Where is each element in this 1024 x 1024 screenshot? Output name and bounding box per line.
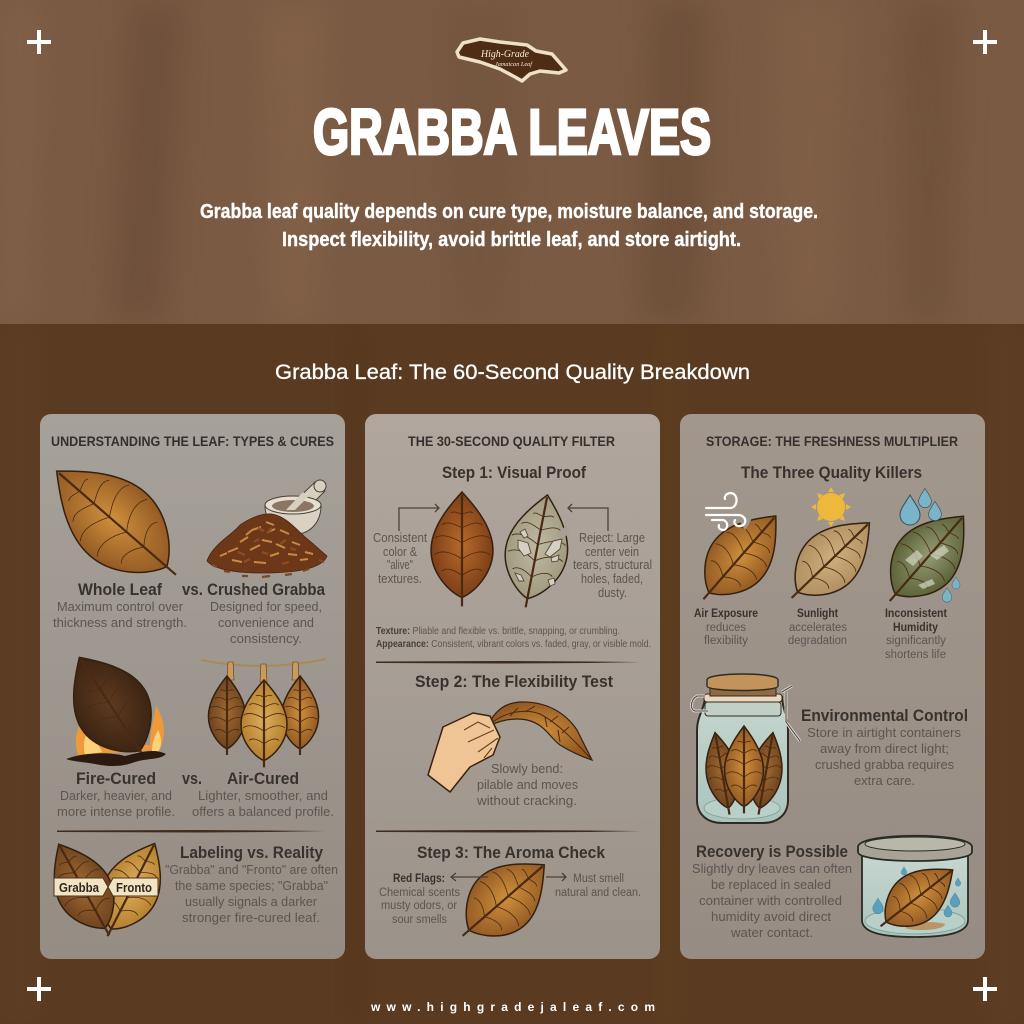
icon: moldy leaf — [866, 495, 987, 622]
text: labeling description: stronger fire-cured leaf. — [182, 910, 320, 925]
subtitle — [200, 201, 818, 251]
text: labeling description — [165, 862, 338, 925]
icon: grabba and fronto leaves with labels: Fronto — [116, 881, 152, 895]
background — [0, 0, 1024, 324]
decorative plus: top left — [27, 30, 51, 54]
icon: water drops — [900, 488, 960, 602]
text: recovery description: humidity avoid direct — [711, 909, 831, 924]
logo: Jamaican Leaf — [495, 61, 533, 68]
icon: grabba and fronto leaves with labels: Grabba — [59, 881, 100, 895]
text: inconsistent humidity: Humidity — [893, 622, 939, 634]
icon: hand bending leaf — [428, 702, 592, 792]
panel heading: STORAGE: THE FRESHNESS MULTIPLIER — [706, 433, 958, 449]
text: recovery description — [692, 861, 852, 940]
text: sunlight: Sunlight — [797, 608, 838, 620]
text: reject caption — [573, 530, 652, 600]
text: labeling description: "Grabba" and "Fronto" are often — [165, 862, 338, 877]
comparison label: fire vs air — [76, 769, 299, 788]
heading: recovery: Recovery is Possible — [696, 842, 848, 861]
text: texture and appearance notes: Texture: Pliable and flexible vs. brittle, snapping, or crumbling. — [376, 625, 620, 637]
text: crushed description — [210, 599, 322, 646]
comparison label: fire vs air: vs. — [182, 769, 202, 788]
text: recovery description: be replaced in sealed — [711, 877, 831, 892]
text: inconsistent humidity — [885, 608, 947, 661]
comparison label: whole vs crushed — [78, 580, 325, 599]
text: sunlight: degradation — [788, 635, 847, 647]
text: whole leaf description — [53, 599, 187, 630]
logo — [457, 39, 566, 81]
arrow: good leaf — [399, 504, 439, 531]
panel: types and cures — [29, 414, 345, 959]
icon: whole leaf — [29, 439, 203, 607]
icon: fire-cured leaf — [48, 637, 176, 779]
comparison label: whole vs crushed: Whole Leaf — [78, 580, 162, 599]
text: reject caption: Reject: Large — [579, 530, 645, 545]
step 1 heading: Step 1: Visual Proof — [442, 463, 586, 482]
text: whole leaf description: thickness and strength. — [53, 615, 187, 630]
text: red flags — [379, 873, 460, 926]
heading: environmental control: Environmental Control — [801, 706, 968, 725]
text: inconsistent humidity: Inconsistent — [885, 608, 947, 620]
text: crushed description: convenience and — [218, 615, 314, 630]
text: labeling description: the same species; "Grabba" — [175, 878, 328, 893]
text: clean smell — [555, 873, 641, 899]
text: recovery description: Slightly dry leaves can often — [692, 861, 852, 876]
text: inconsistent humidity: shortens life — [885, 649, 946, 661]
text: inconsistent humidity: significantly — [886, 635, 946, 647]
section heading: Grabba Leaf: The 60-Second Quality Breakdown — [275, 361, 750, 384]
text: texture and appearance notes — [376, 625, 651, 650]
comparison label: whole vs crushed: vs. Crushed Grabba — [182, 580, 325, 599]
icon: good leaf — [431, 492, 493, 606]
icon: jar with leaves — [691, 674, 800, 823]
text: good leaf caption — [373, 530, 427, 586]
icon: wind — [706, 493, 745, 530]
text: good leaf caption: color & — [383, 544, 417, 559]
text: reject caption: center vein — [585, 544, 639, 559]
text: environmental control description: crushed grabba requires — [815, 757, 954, 772]
panel: storage — [680, 414, 987, 959]
text: fire-cured description — [57, 788, 175, 819]
title: GRABBA LEAVES — [313, 96, 711, 168]
icon: sun-faded leaf — [771, 502, 890, 619]
text: air exposure: Air Exposure — [694, 608, 758, 620]
text: recovery description: water contact. — [730, 925, 813, 940]
text: flexibility caption: pilable and moves — [477, 777, 578, 792]
text: air-cured description: Lighter, smoother, and — [198, 788, 328, 803]
text: reject caption: holes, faded, — [581, 571, 643, 586]
text: air exposure — [694, 608, 758, 647]
text: reject caption: tears, structural — [573, 557, 652, 572]
text: flexibility caption — [476, 761, 578, 808]
panel heading: UNDERSTANDING THE LEAF: TYPES & CURES — [51, 433, 334, 449]
text: crushed description: Designed for speed, — [210, 599, 322, 614]
text: texture and appearance notes: Appearance: Consistent, vibrant colors vs. faded, gray, or visible mold. — [376, 638, 651, 650]
text: red flags: Chemical scents — [379, 887, 460, 899]
text: sunlight — [788, 608, 847, 647]
decorative plus: bottom right — [973, 977, 997, 1001]
text: fire-cured description: Darker, heavier, and — [60, 788, 172, 803]
text: air exposure: flexibility — [704, 635, 748, 647]
text: reject caption: dusty. — [598, 585, 627, 600]
text: good leaf caption: textures. — [378, 571, 422, 586]
text: air-cured description — [192, 788, 334, 819]
text: red flags: musty odors, or — [381, 900, 457, 912]
text: crushed description: consistency. — [230, 631, 302, 646]
heading: labeling vs reality: Labeling vs. Reality — [180, 843, 323, 862]
step 3 heading: Step 3: The Aroma Check — [417, 843, 605, 862]
text: recovery description: container with controlled — [699, 893, 842, 908]
icon: air-cured leaves on a line — [201, 659, 326, 767]
text: air-cured description: offers a balanced profile. — [192, 804, 334, 819]
icon: damaged leaf — [495, 489, 578, 613]
text: air exposure: reduces — [706, 622, 746, 634]
icon: crushed grabba with mortar — [207, 480, 327, 577]
text: clean smell: natural and clean. — [555, 887, 641, 899]
text: fire-cured description: more intense profile. — [57, 804, 175, 819]
panel heading: THE 30-SECOND QUALITY FILTER — [408, 433, 615, 449]
text: labeling description: usually signals a darker — [185, 894, 318, 909]
text: red flags: Red Flags: — [393, 873, 445, 885]
comparison label: fire vs air: Air-Cured — [227, 769, 299, 788]
step 2 heading: Step 2: The Flexibility Test — [415, 672, 613, 691]
decorative plus: top right — [973, 30, 997, 54]
sub-heading: quality killers: The Three Quality Killers — [741, 463, 922, 482]
comparison label: fire vs air: Fire-Cured — [76, 769, 156, 788]
footer website: www.highgradejaleaf.com — [370, 1000, 655, 1014]
icon: aroma leaf — [441, 840, 566, 961]
arrow: clean smell — [546, 873, 566, 881]
text: sunlight: accelerates — [789, 622, 847, 634]
text: whole leaf description: Maximum control over — [57, 599, 184, 614]
icon: grabba and fronto leaves with labels — [35, 831, 179, 949]
text: good leaf caption: "alive" — [387, 557, 413, 572]
text: red flags: sour smells — [392, 914, 447, 926]
arrow: bad leaf — [568, 504, 608, 531]
panel: quality filter — [365, 414, 660, 961]
logo: High-Grade — [480, 49, 530, 60]
text: flexibility caption: Slowly bend: — [491, 761, 563, 776]
decorative plus: bottom left — [27, 977, 51, 1001]
text: environmental control description: Store in airtight containers — [807, 725, 962, 740]
subtitle: Grabba leaf quality depends on cure type, moisture balance, and storage. — [200, 201, 818, 223]
icon: air-exposed leaf — [681, 496, 798, 619]
text: flexibility caption: without cracking. — [476, 793, 577, 808]
subtitle: Inspect flexibility, avoid brittle leaf, and store airtight. — [282, 229, 741, 251]
arrow: red flags — [451, 873, 488, 881]
text: clean smell: Must smell — [573, 873, 624, 885]
text: environmental control description: away from direct light; — [820, 741, 949, 756]
text: good leaf caption: Consistent — [373, 530, 427, 545]
icon: sealed container — [858, 836, 972, 946]
text: environmental control description: extra care. — [854, 773, 915, 788]
text: environmental control description — [807, 725, 962, 788]
icon: sun — [811, 487, 851, 527]
